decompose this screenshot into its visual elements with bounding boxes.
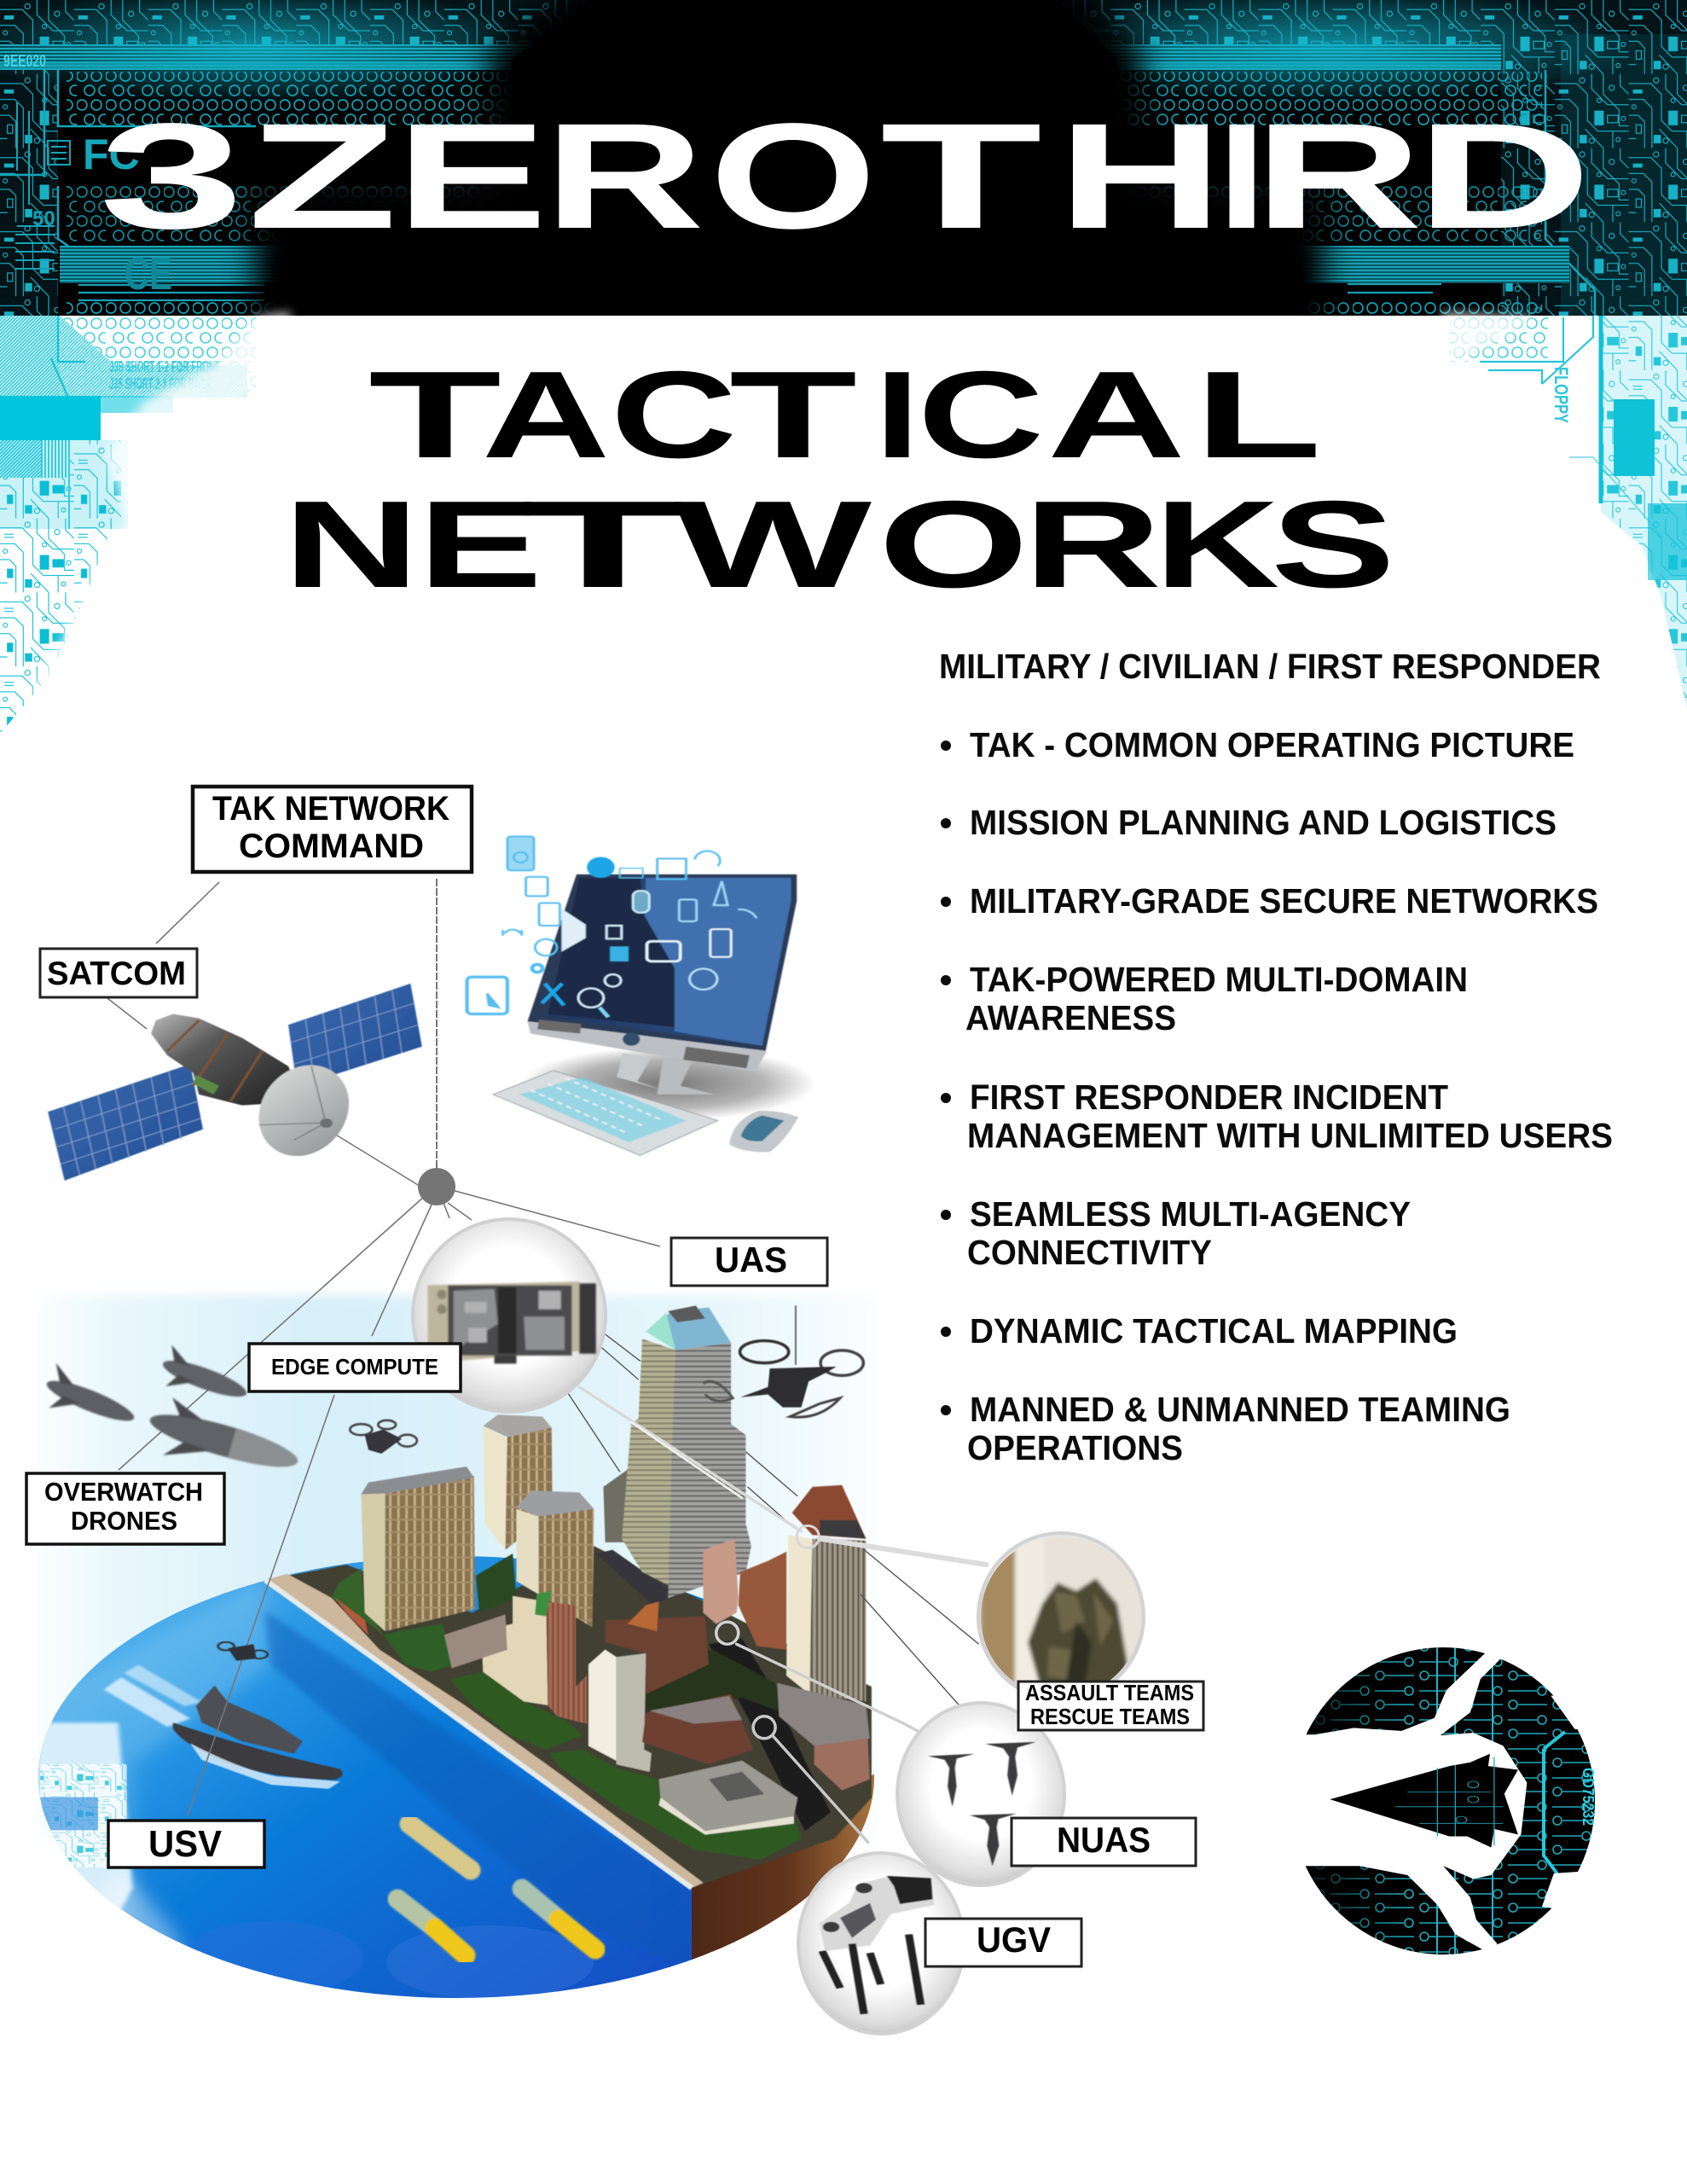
heading: NETWORKS: T [522,475,684,613]
label: TAK network command: TAK NETWORK [212,790,449,828]
heading: NETWORKS: O [878,475,1029,613]
icon: overwatch missiles [38,1345,305,1491]
building: left tower [361,1467,475,1631]
heading: NETWORKS: E [418,475,542,613]
title: company name: Z [247,93,397,260]
building: red house [815,1739,870,1791]
icon: nano drones [928,1742,1036,1866]
panel: faded circuit left [0,312,290,751]
cyan bar [0,396,101,440]
heading: NETWORKS: N [283,475,420,613]
label: SATCOM [40,949,197,997]
label: edge compute: EDGE COMPUTE [271,1354,438,1380]
title: company name: H [1058,93,1223,260]
icon: left solar panel [48,1064,203,1181]
text block: capabilities list [939,647,1613,1467]
panel: sky behind city [26,1295,878,1841]
title: company name: O [710,93,877,260]
icon: dish [246,1058,361,1164]
heading: TACTICAL: A [482,346,610,484]
title: company name: D [1416,93,1591,260]
callout: UGV bubble [798,1853,964,2034]
icon: satellite [48,984,422,1181]
label: UGV [925,1919,1081,1966]
heading: NETWORKS: K [1155,475,1279,613]
glow: left top [0,0,546,107]
callout: assault and rescue teams photo [978,1533,1148,1706]
building: brown block [606,1617,709,1694]
text block: capabilities list: OPERATIONS [967,1428,1183,1467]
dirt wall [692,1774,874,1960]
building: podium [777,1683,870,1745]
label: UAS [671,1238,827,1286]
text block: capabilities list: FIRST RESPONDER INCIDENT [970,1077,1448,1117]
heading: TACTICAL: I [875,346,919,484]
glow: right top [1107,0,1617,104]
label: USV: USV [148,1823,223,1865]
heading: TACTICAL: T [368,346,501,484]
title: company name: R [544,93,704,260]
heading: NETWORKS: S [1271,475,1395,613]
missile one [38,1362,142,1439]
building: tan tower [481,1590,587,1723]
label: TAK network command: COMMAND [239,828,424,865]
text block: capabilities list: DYNAMIC TACTICAL MAPPING [970,1311,1458,1350]
label: USV [108,1821,264,1867]
text block: capabilities list: TAK - COMMON OPERATING PICTURE [970,725,1574,764]
building: orange block [739,1552,786,1650]
callout: NUAS bubble [897,1703,1064,1885]
panel: faded circuit right [1441,312,1687,725]
text block: capabilities list: MILITARY-GRADE SECURE NETWORKS [970,881,1598,921]
heading: TACTICAL: C [611,346,737,484]
FCC mark: FC [83,131,140,178]
title: company name: T [880,93,1042,260]
building: skyscraper [622,1305,751,1598]
label: NUAS: NUAS [1057,1820,1151,1860]
vehicle two [397,1899,466,1955]
jumper note: J35 SHORT 1-2 FOR FRONT [109,358,220,375]
icon: large drone [704,1305,863,1417]
heading: TACTICAL: T [729,346,857,484]
device body [427,1281,596,1363]
label: TAK network command [193,787,472,872]
heading: TACTICAL: A [1047,346,1186,484]
building: brick block [642,1694,753,1764]
board label: 9EE020 [3,52,46,71]
text block: capabilities list: TAK-POWERED MULTI-DOMAIN [970,960,1468,999]
label: overwatch drones: OVERWATCH [44,1477,203,1507]
monitor stand [617,1053,663,1090]
building: middle tower [517,1490,594,1628]
panel: city block [265,1305,872,1888]
building: pink block [704,1539,739,1623]
label: SATCOM: SATCOM [47,956,186,992]
CE mark: CE [125,248,172,299]
jumper note: J35 SHORT 2-3 FOR BACK [109,375,212,392]
label: UAS: UAS [715,1240,787,1280]
label: overwatch drones: DRONES [71,1506,177,1536]
label: overwatch drones [26,1473,224,1544]
icon: 3ZEROTHIRD logo [1305,1647,1595,1955]
missile two [156,1345,253,1413]
text block: capabilities list: MANAGEMENT WITH UNLIMITED USERS [967,1116,1613,1155]
text block: capabilities list: CONNECTIVITY [967,1233,1212,1272]
floppy connector label: FLOPPY [1551,367,1572,423]
icon: computer [467,836,816,1155]
connector lines [104,879,986,1842]
title: company name: 3 [99,93,244,260]
icon: right solar panel [288,984,422,1087]
text block: capabilities list: MILITARY / CIVILIAN / FIRST RESPONDER [939,647,1601,686]
number mark: 50 [32,207,55,230]
label: assault and rescue teams: ASSAULT TEAMS [1025,1680,1194,1705]
label: edge compute [249,1344,461,1391]
heading: TACTICAL: C [918,346,1044,484]
icon: robot dog [820,1876,935,2014]
vehicle three [522,1889,595,1949]
icon: underwater vehicles [397,1824,595,1955]
monitor base bezel [528,1019,767,1072]
hub node [418,1168,455,1205]
mouse [729,1111,798,1152]
label: NUAS [1012,1818,1196,1866]
keyboard [493,1071,718,1155]
title: company name: E [396,93,548,260]
missile three [142,1393,305,1491]
label: UGV: UGV [977,1920,1051,1960]
building: side rotunda [603,1468,629,1542]
label: assault and rescue teams [1018,1680,1203,1730]
panel: circuit board header [0,0,1687,341]
heading: NETWORKS: R [1023,475,1162,613]
icon: boat [173,1686,343,1789]
callout: edge compute device [413,1219,606,1412]
label: assault and rescue teams: RESCUE TEAMS [1030,1704,1190,1729]
floating app icons [467,836,757,1017]
title: company name: R [1254,93,1423,260]
building: white tower [588,1650,652,1772]
building: low house [444,1614,507,1668]
chip marking: GD75232 [1580,1768,1597,1826]
panel: water disc [26,1544,887,2013]
building: right tower [786,1485,866,1701]
monitor screen [528,874,797,1051]
heading: TACTICAL: L [1194,346,1322,484]
text block: capabilities list: SEAMLESS MULTI-AGENCY [970,1194,1411,1234]
title: company name: I [1218,93,1266,260]
icon: small drone [350,1420,417,1454]
text block: capabilities list: AWARENESS [965,998,1176,1037]
vehicle one [409,1824,471,1870]
text block: capabilities list: MANNED & UNMANNED TEAMING [970,1390,1510,1429]
building: courtyard [658,1761,797,1835]
text block: capabilities list: MISSION PLANNING AND LOGISTICS [970,803,1557,842]
icon: water drone [218,1642,268,1661]
heading: NETWORKS: W [674,475,872,613]
building: rear tower [483,1414,553,1550]
